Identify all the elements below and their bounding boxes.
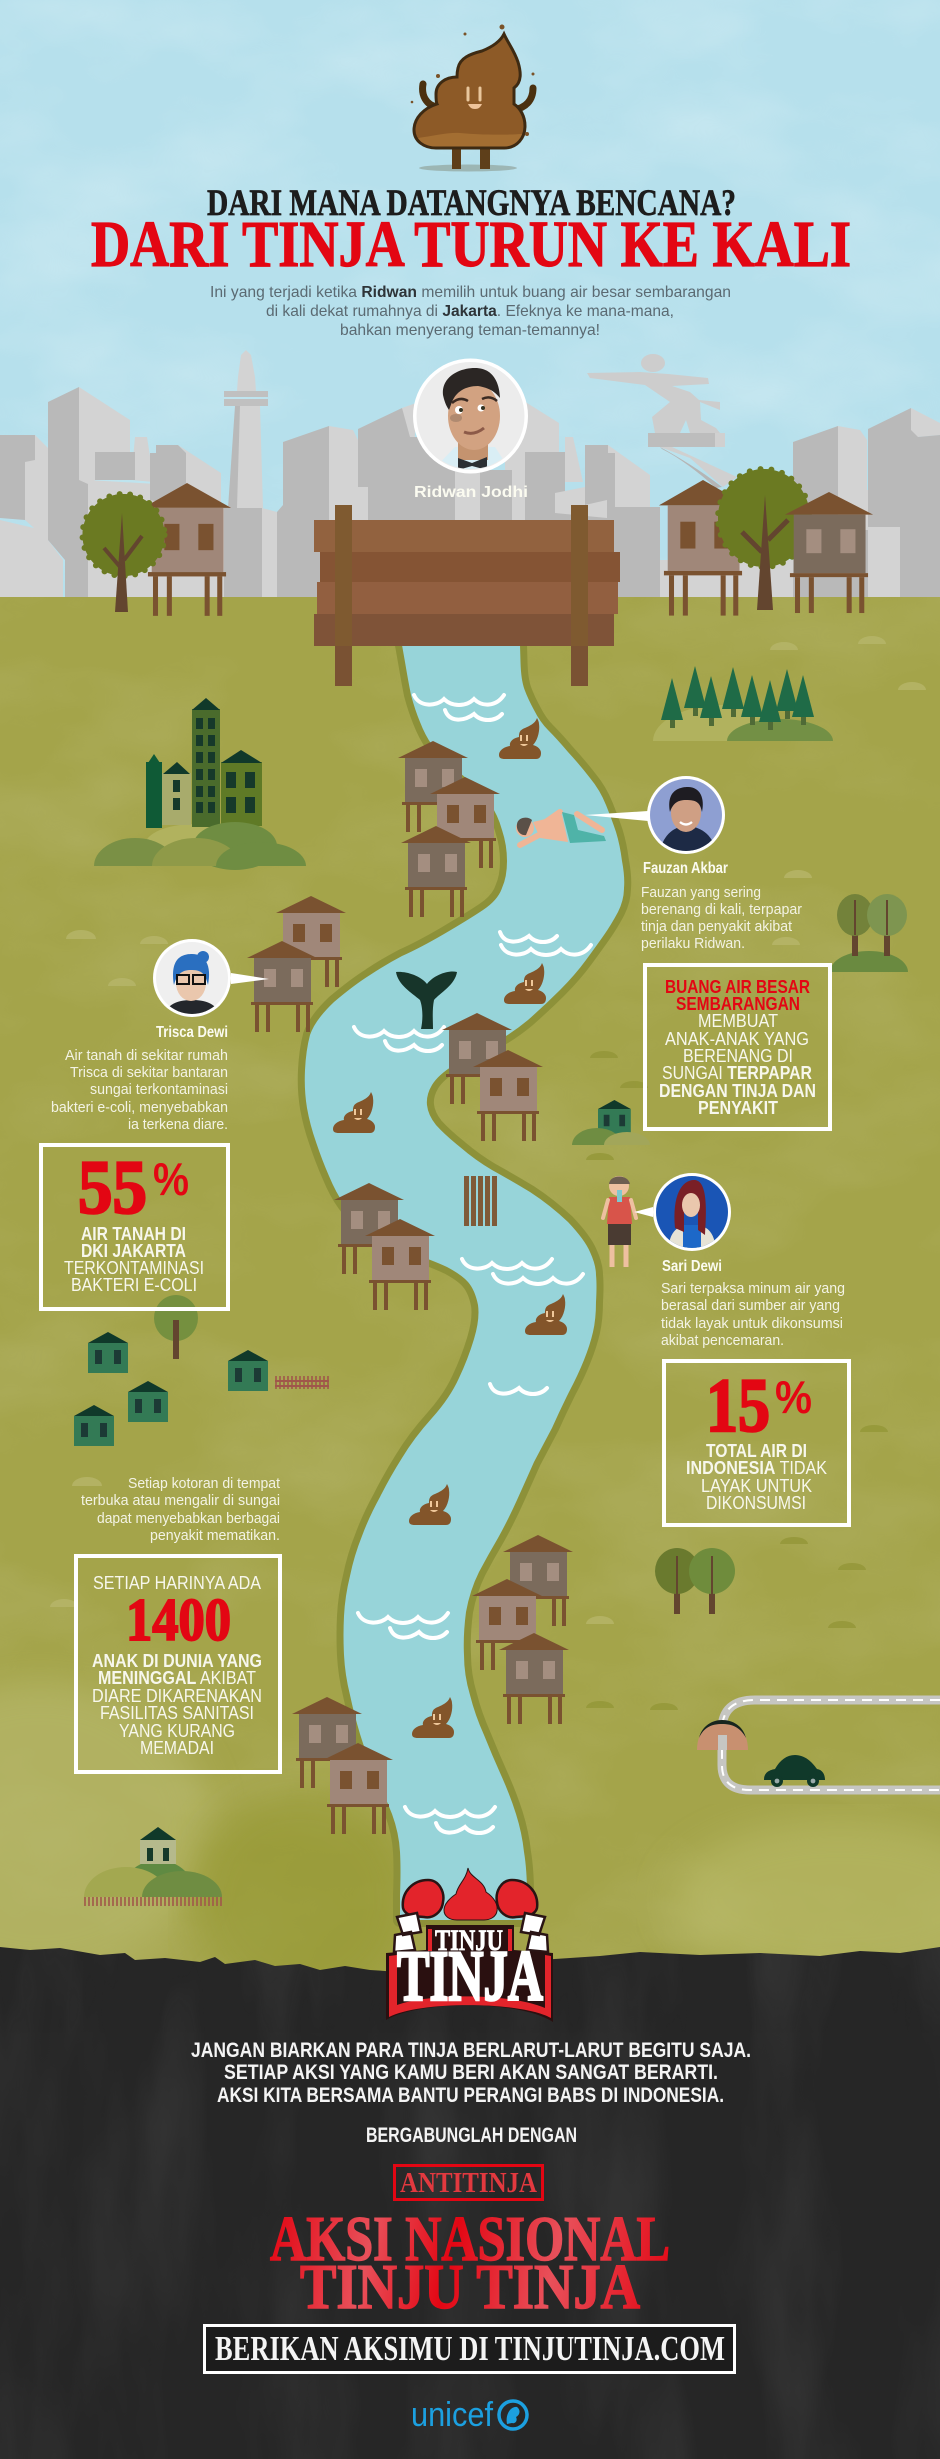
stat box: 1400: MENINGGAL AKIBAT <box>98 1668 256 1688</box>
tree left <box>82 494 164 612</box>
stat box: 15%: % <box>775 1371 812 1423</box>
sky background <box>0 0 940 600</box>
stat box: 1400: YANG KURANG <box>119 1721 235 1741</box>
main poo character <box>411 24 534 172</box>
Sari text: Sari Dewi <box>662 1258 722 1275</box>
heading: aksi nasional <box>270 2203 670 2322</box>
intro text <box>210 284 731 339</box>
stat box: 1400: SETIAP HARINYA ADA <box>93 1573 261 1593</box>
text block: kotoran: terbuka atau mengalir di sungai <box>81 1493 280 1509</box>
Trisca text: Trisca Dewi <box>156 1024 228 1041</box>
callout box: buang air besar: BUANG AIR BESAR <box>665 977 810 997</box>
text block: kotoran: Setiap kotoran di tempat <box>128 1476 280 1492</box>
Fauzan text: berenang di kali, terpapar <box>641 902 802 918</box>
avatar: Fauzan Akbar <box>585 776 725 854</box>
pine forest <box>653 666 833 741</box>
avatar: Ridwan Jodhi <box>413 358 528 474</box>
avatar: Trisca Dewi <box>153 939 269 1017</box>
title: DARI MANA DATANGNYA BENCANA? <box>207 183 736 224</box>
Trisca text <box>51 1024 228 1133</box>
drinking girl figure <box>603 1176 636 1267</box>
fence <box>275 1376 329 1389</box>
website button <box>204 2326 734 2372</box>
call to action text: BERGABUNGLAH DENGAN <box>366 2124 577 2147</box>
logo: Tinju Tinja <box>386 1868 553 2022</box>
stat box: 55%: BAKTERI E-COLI <box>71 1275 197 1295</box>
text block: kotoran: dapat menyebabkan berbagai <box>97 1511 280 1527</box>
stat box: 15%: DIKONSUMSI <box>706 1493 806 1513</box>
boxing gloves and arms <box>394 1880 548 1952</box>
Trisca text: ia terkena diare. <box>128 1117 228 1133</box>
stat box: 55%: TERKONTAMINASI <box>64 1258 204 1278</box>
icon: whale tail <box>396 972 457 1029</box>
title <box>91 183 851 281</box>
stat box: 15%: 15 <box>706 1364 770 1448</box>
stat box: 55%: AIR TANAH DI <box>81 1224 186 1244</box>
trees on hill right <box>830 894 908 972</box>
stat box: 1400: DIARE DIKARENAKAN <box>92 1686 262 1706</box>
green town on hills <box>94 698 306 870</box>
stat box: 1400: FASILITAS SANITASI <box>100 1703 254 1723</box>
road with tunnel and car <box>697 1700 940 1790</box>
red poo in logo <box>444 1868 497 1920</box>
small green house right <box>572 1100 650 1145</box>
Sari text: akibat pencemaran. <box>661 1333 784 1349</box>
pair of trees right <box>655 1548 735 1614</box>
Sari text: berasal dari sumber air yang <box>661 1298 840 1314</box>
city skyline silhouette <box>0 350 940 597</box>
Fauzan text: Fauzan yang sering <box>641 885 761 901</box>
logo: Tinju Tinja: TINJU <box>435 1924 503 1957</box>
callout box: buang air besar: DENGAN TINJA DAN <box>659 1081 816 1101</box>
stat box: 55%: DKI JAKARTA <box>81 1241 186 1261</box>
Trisca text: Air tanah di sekitar rumah <box>65 1048 228 1064</box>
heading: aksi nasional: TINJU TINJA <box>300 2251 640 2322</box>
Sari text <box>661 1258 845 1349</box>
call to action text <box>191 2039 751 2147</box>
Trisca text: Trisca di sekitar bantaran <box>70 1065 228 1081</box>
badge: antitinja: ANTITINJA <box>400 2167 537 2199</box>
Trisca text: sungai terkontaminasi <box>90 1082 228 1098</box>
green village left <box>74 1295 329 1446</box>
Sari text: tidak layak untuk dikonsumsi <box>661 1316 843 1332</box>
website button: BERIKAN AKSIMU DI TINJUTINJA.COM <box>215 2329 725 2368</box>
Fauzan text <box>641 860 802 952</box>
intro text: bahkan menyerang teman-temannya! <box>340 322 600 339</box>
stat box: 55%: % <box>153 1153 189 1205</box>
callout box: buang air besar <box>645 965 830 1129</box>
river <box>305 645 624 1920</box>
stilt houses along the river <box>247 741 573 1834</box>
logo: unicef: unicef <box>411 2396 493 2434</box>
stat box: 15% <box>664 1361 849 1525</box>
stat box: 55%: 55 <box>78 1146 147 1230</box>
Fauzan text: tinja dan penyakit akibat <box>641 919 792 935</box>
heading: aksi nasional: AKSI NASIONAL <box>270 2203 670 2274</box>
callout box: buang air besar: MEMBUAT <box>698 1011 778 1031</box>
wooden bridge <box>314 505 620 686</box>
stat box: 1400: 1400 <box>126 1587 231 1653</box>
riverside houses and trees at the top <box>82 469 873 616</box>
icon: car <box>764 1755 825 1787</box>
callout box: buang air besar: SUNGAI TERPAPAR <box>662 1063 812 1083</box>
stat box: 15%: LAYAK UNTUK <box>701 1476 812 1496</box>
callout box: buang air besar: SEMBARANGAN <box>676 994 800 1014</box>
call to action text: JANGAN BIARKAN PARA TINJA BERLARUT-LARUT BEGITU SAJA. <box>191 2039 751 2062</box>
stat box: 1400: ANAK DI DUNIA YANG <box>92 1651 262 1671</box>
stat box: 1400 <box>76 1556 280 1772</box>
callout box: buang air besar: BERENANG DI <box>683 1046 793 1066</box>
name: Ridwan Jodhi: Ridwan Jodhi <box>414 484 528 501</box>
text block: kotoran <box>81 1476 280 1544</box>
small house with hills bottom left <box>84 1827 222 1906</box>
Trisca text: bakteri e-coli, menyebabkan <box>51 1100 228 1116</box>
stat box: 1400: MEMADAI <box>140 1738 214 1758</box>
text block: kotoran: penyakit mematikan. <box>150 1528 280 1544</box>
callout box: buang air besar: ANAK-ANAK YANG <box>665 1029 809 1049</box>
stat box: 15%: TOTAL AIR DI <box>706 1441 807 1461</box>
stat box: 15%: INDONESIA TIDAK <box>686 1458 827 1478</box>
floating waste icons <box>333 718 567 1738</box>
swimmer figure <box>516 812 606 845</box>
callout box: buang air besar: PENYAKIT <box>698 1098 778 1118</box>
logo: Tinju Tinja: TINJA <box>397 1936 543 2016</box>
dark bottom section <box>0 1940 940 2459</box>
call to action text: AKSI KITA BERSAMA BANTU PERANGI BABS DI INDONESIA. <box>217 2084 724 2107</box>
ground background <box>0 597 940 2010</box>
river waves <box>354 695 591 1833</box>
Fauzan text: perilaku Ridwan. <box>641 936 745 952</box>
logo banner <box>386 1925 553 2022</box>
avatar: Sari Dewi <box>634 1173 731 1251</box>
intro text: Ini yang terjadi ketika Ridwan memilih untuk buang air besar sembarangan <box>210 284 731 301</box>
statue silhouette <box>587 354 737 488</box>
stat box: 55% <box>41 1145 228 1309</box>
national monument tower <box>224 350 268 508</box>
Fauzan text: Fauzan Akbar <box>643 860 728 877</box>
tree right <box>718 469 810 610</box>
icon: wooden raft <box>464 1176 497 1226</box>
intro text: di kali dekat rumahnya di Jakarta. Efeknya ke mana-mana, <box>266 303 674 320</box>
Sari text: Sari terpaksa minum air yang <box>661 1281 845 1297</box>
tunnel <box>697 1720 748 1750</box>
call to action text: SETIAP AKSI YANG KAMU BERI AKAN SANGAT BERARTI. <box>224 2061 718 2084</box>
